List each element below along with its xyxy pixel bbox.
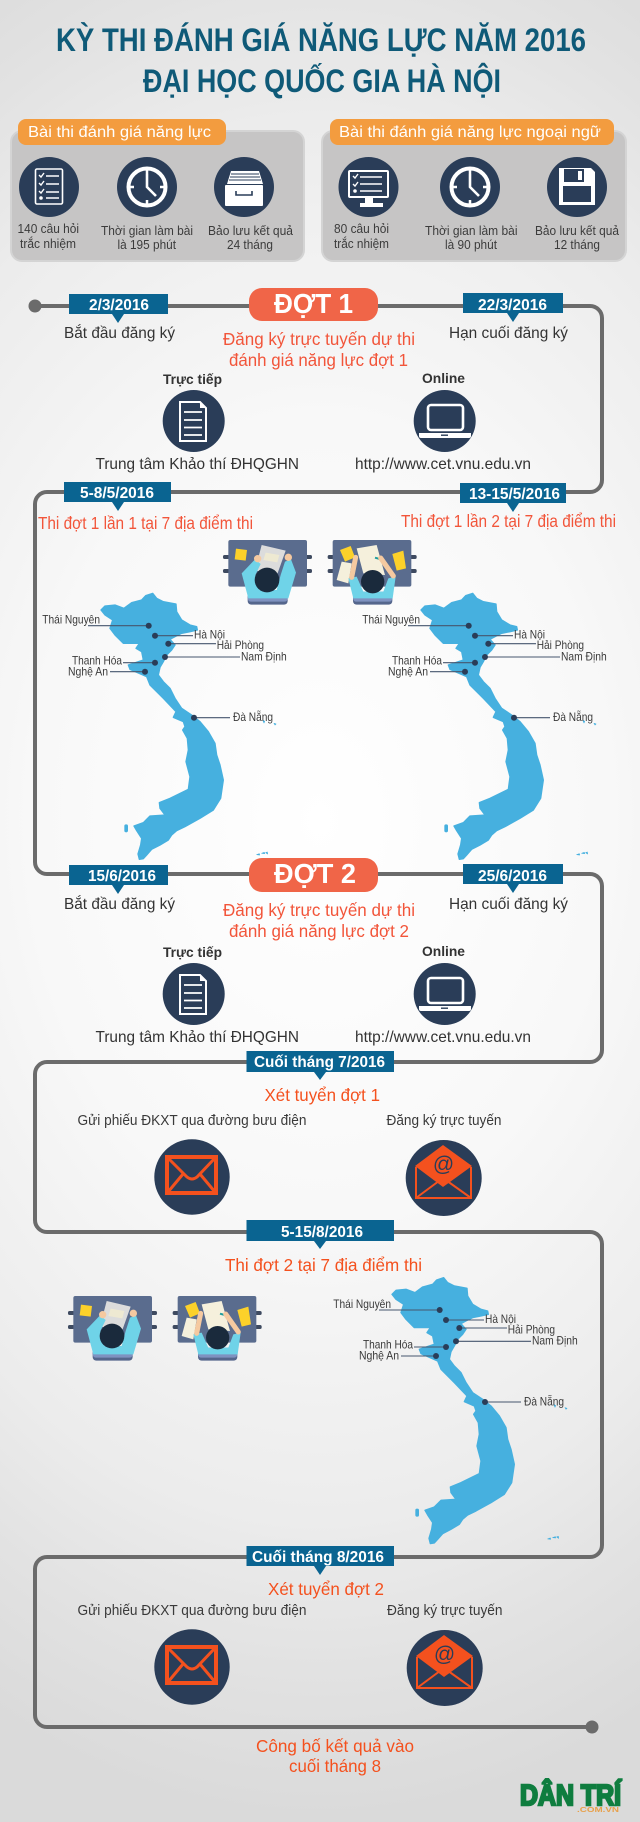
panel heading tag	[330, 119, 614, 145]
map: vietnam left: Nam Định	[241, 649, 287, 663]
map: vietnam right: Nam Định	[561, 649, 607, 663]
date tag: 13-15/5/2016: 13-15/5/2016	[469, 486, 560, 503]
panel: bài thi đánh giá năng lực	[11, 119, 304, 261]
map: vietnam left	[42, 593, 287, 859]
date tag: 15/6/2016: 15/6/2016	[88, 868, 156, 885]
map: vietnam centre: Nam Định	[532, 1334, 578, 1348]
text: thời gian làm bài 90 phút: Thời gian làm bài	[425, 224, 518, 238]
date tag: 25/6/2016: 25/6/2016	[478, 868, 547, 885]
icon: envelope	[154, 1629, 230, 1705]
date tag: 13-15/5/2016	[460, 483, 566, 512]
map: vietnam right	[362, 593, 607, 859]
text: bảo lưu kết quả 12 tháng: Bảo lưu kết quả	[535, 224, 619, 238]
text: website url: http://www.cet.vnu.edu.vn	[355, 456, 531, 473]
icon: email envelope: @	[433, 1153, 454, 1176]
panel heading tag: Bài thi đánh giá năng lực ngoại ngữ	[339, 124, 601, 141]
title: ĐẠI HỌC QUỐC GIA HÀ NỘI	[143, 63, 501, 99]
map: vietnam right: Thanh Hóa	[392, 653, 442, 667]
text: trung tâm khảo thí: Trung tâm Khảo thí ĐHQGHN	[96, 1029, 299, 1046]
date tag: 5-15/8/2016	[246, 1220, 394, 1249]
text: đăng ký trực tuyến đợt 2: Đăng ký trực tuyến dự thi	[223, 900, 415, 920]
text: online: Online	[422, 370, 465, 386]
text: hạn cuối đăng ký: Hạn cuối đăng ký	[449, 325, 568, 342]
icon: laptop	[414, 963, 476, 1025]
icon: checklist	[19, 157, 79, 217]
text: bảo lưu kết quả 12 tháng: 12 tháng	[554, 238, 600, 252]
text: đăng ký trực tuyến đợt 2: đánh giá năng lực đợt 2	[229, 921, 409, 941]
icon: archive drawer	[214, 157, 274, 217]
icon: floppy disk	[547, 157, 607, 217]
map: vietnam right: Thái Nguyên	[362, 613, 420, 627]
map: vietnam right: Nghệ An	[388, 664, 428, 678]
logo: dân trí: .COM.VN	[577, 1807, 619, 1814]
text: thời gian làm bài 195 phút: là 195 phút	[118, 238, 176, 252]
date tag: 15/6/2016	[69, 865, 168, 894]
date tag: cuối tháng 7/2016: Cuối tháng 7/2016	[254, 1054, 385, 1071]
text: đăng ký trực tuyến đợt 1: đánh giá năng lực đợt 1	[229, 350, 408, 370]
text: bắt đầu đăng ký: Bắt đầu đăng ký	[64, 894, 175, 913]
map: vietnam centre: Hải Phòng	[508, 1322, 555, 1336]
text: website url: http://www.cet.vnu.edu.vn	[355, 1029, 531, 1046]
text: thi đợt 1 lần 1: Thi đợt 1 lần 1 tại 7 địa điểm thi	[38, 513, 253, 533]
map: vietnam centre: Thái Nguyên	[333, 1297, 391, 1311]
map: vietnam centre: Nghệ An	[359, 1349, 399, 1363]
icon: email envelope	[407, 1630, 483, 1706]
text: 80 câu hỏi: 80 câu hỏi	[334, 222, 389, 236]
date tag: cuối tháng 8/2016: Cuối tháng 8/2016	[252, 1549, 384, 1566]
text: công bố kết quả: cuối tháng 8	[289, 1756, 381, 1776]
text: xét tuyển đợt 2: Xét tuyển đợt 2	[268, 1579, 384, 1599]
map: vietnam right: Hà Nội	[514, 628, 545, 642]
text: công bố kết quả: Công bố kết quả vào	[256, 1736, 414, 1756]
map: vietnam left: Thanh Hóa	[72, 653, 122, 667]
text: đăng ký trực tuyến đợt 1: Đăng ký trực tuyến dự thi	[223, 329, 415, 349]
text: bảo lưu kết quả 24 tháng	[208, 224, 293, 252]
text: 140 câu hỏi: 140 câu hỏi	[18, 222, 79, 236]
icon: computer checklist	[338, 157, 398, 217]
text: 140 câu hỏi	[18, 222, 79, 251]
icon: clock	[440, 157, 500, 217]
text: trung tâm khảo thí: Trung tâm Khảo thí ĐHQGHN	[96, 456, 299, 473]
date tag: cuối tháng 8/2016	[246, 1546, 394, 1575]
text: thời gian làm bài 195 phút	[101, 224, 193, 252]
text: thời gian làm bài 90 phút: là 90 phút	[445, 238, 497, 252]
text: đăng ký trực tuyến: Đăng ký trực tuyến	[387, 1603, 502, 1619]
map: vietnam left: Đà Nẵng	[233, 709, 273, 724]
text: xét tuyển đợt 1: Xét tuyển đợt 1	[264, 1085, 380, 1105]
map: vietnam centre: Hà Nội	[485, 1312, 516, 1326]
badge: đợt 1: ĐỢT 1	[274, 288, 353, 319]
map: vietnam left: Nghệ An	[68, 664, 108, 678]
date tag: 25/6/2016	[463, 864, 563, 893]
date tag: cuối tháng 7/2016	[246, 1051, 394, 1080]
text: 80 câu hỏi	[334, 222, 389, 251]
text: thời gian làm bài 90 phút	[425, 224, 518, 252]
timeline line	[28, 300, 602, 1734]
date tag: 5-8/5/2016: 5-8/5/2016	[80, 485, 154, 502]
map: vietnam centre	[333, 1278, 578, 1544]
map: vietnam left: Thái Nguyên	[42, 613, 100, 627]
text: thời gian làm bài 195 phút: Thời gian làm bài	[101, 224, 193, 238]
map: vietnam centre: Thanh Hóa	[363, 1338, 413, 1352]
text: bảo lưu kết quả 24 tháng: Bảo lưu kết quả	[208, 224, 293, 238]
date tag: 22/3/2016: 22/3/2016	[478, 297, 547, 314]
text: đăng ký trực tuyến: Đăng ký trực tuyến	[386, 1113, 502, 1129]
text: đăng ký trực tuyến đợt 2	[223, 900, 415, 941]
text: gửi phiếu: Gửi phiếu ĐKXT qua đường bưu điện	[78, 1603, 306, 1619]
icon: email envelope: @	[434, 1643, 455, 1666]
text: công bố kết quả	[256, 1736, 414, 1776]
text: trực tiếp: Trực tiếp	[163, 944, 222, 960]
icon: clock	[117, 157, 177, 217]
text: online: Online	[422, 943, 465, 959]
date tag: 5-15/8/2016: 5-15/8/2016	[281, 1224, 363, 1241]
text: đăng ký trực tuyến đợt 1	[223, 329, 415, 370]
icon: laptop	[414, 390, 476, 452]
panel heading tag	[18, 119, 226, 145]
icon: document	[163, 390, 225, 452]
date tag: 2/3/2016: 2/3/2016	[89, 297, 149, 314]
text: thi đợt 2: Thi đợt 2 tại 7 địa điểm thi	[225, 1255, 422, 1275]
title	[56, 22, 586, 99]
text: 140 câu hỏi: trắc nhiệm	[20, 236, 76, 251]
text: bắt đầu đăng ký: Bắt đầu đăng ký	[64, 323, 175, 342]
logo: dân trí: DÂN TRÍ	[520, 1778, 622, 1812]
icon: students at desks	[68, 1296, 262, 1361]
date tag: 5-8/5/2016	[64, 482, 171, 511]
text: gửi phiếu: Gửi phiếu ĐKXT qua đường bưu điện	[78, 1113, 306, 1129]
text: bảo lưu kết quả 24 tháng: 24 tháng	[227, 238, 273, 252]
panel: bài thi đánh giá năng lực ngoại ngữ	[322, 119, 626, 261]
text: hạn cuối đăng ký: Hạn cuối đăng ký	[449, 896, 568, 913]
map: vietnam left: Hà Nội	[194, 628, 225, 642]
text: thi đợt 1 lần 2: Thi đợt 1 lần 2 tại 7 địa điểm thi	[401, 511, 616, 531]
badge: đợt 1	[249, 288, 378, 321]
panel heading tag: Bài thi đánh giá năng lực	[28, 124, 211, 141]
date tag: 22/3/2016	[463, 293, 563, 322]
icon: envelope	[154, 1139, 230, 1215]
icon: students at desks	[223, 540, 417, 605]
icon: email envelope	[406, 1140, 482, 1216]
map: vietnam right: Hải Phòng	[537, 638, 584, 652]
badge: đợt 2	[249, 858, 378, 892]
map: vietnam left: Hải Phòng	[217, 638, 264, 652]
text: bảo lưu kết quả 12 tháng	[535, 224, 619, 252]
map: vietnam centre: Đà Nẵng	[524, 1393, 564, 1408]
text: 80 câu hỏi: trắc nhiệm	[334, 236, 389, 251]
text: trực tiếp: Trực tiếp	[163, 371, 222, 387]
badge: đợt 2: ĐỢT 2	[274, 858, 356, 889]
icon: document	[163, 963, 225, 1025]
date tag: 2/3/2016	[69, 294, 168, 323]
map: vietnam right: Đà Nẵng	[553, 709, 593, 724]
